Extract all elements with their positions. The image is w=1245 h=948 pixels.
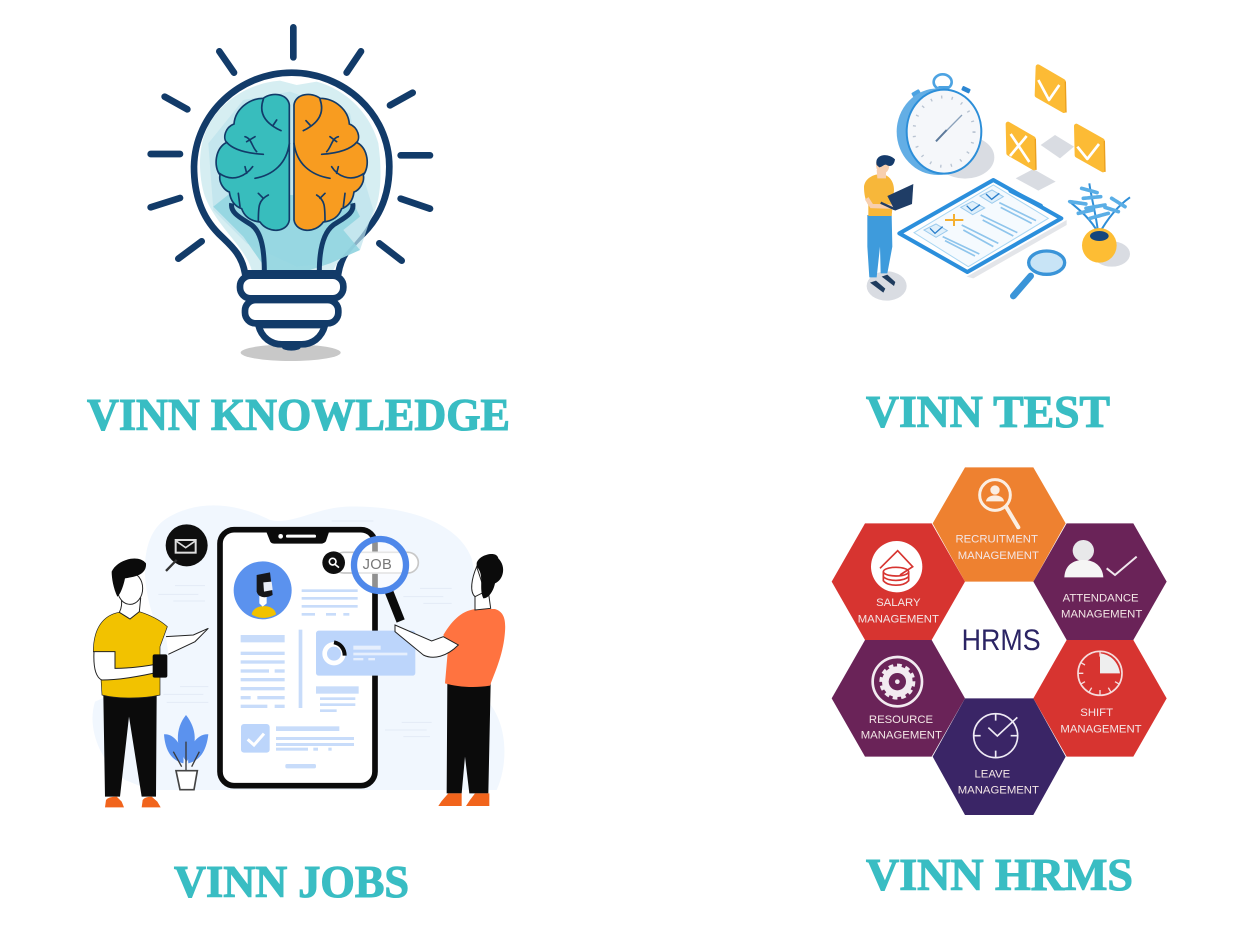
hexagon: salary management: SALARY [876,597,921,609]
hexagon: leave management [933,698,1066,815]
glass bulb [194,73,389,273]
profile avatar [234,561,292,619]
answer cards [1008,67,1105,171]
hexagon: resource management: RESOURCE [869,714,934,726]
magnifying glass [1013,251,1065,296]
person in orange [395,554,505,806]
panel: light bulb brain illustration [151,27,430,361]
chart card [316,631,415,676]
message bubble icon [166,524,208,571]
hexagon: leave management: MANAGEMENT [958,785,1039,797]
hexagon: shift management: SHIFT [1080,707,1113,719]
rays [151,27,430,261]
plant [164,715,208,790]
hexagon: shift management [1033,640,1167,757]
heading: VINN JOBS: VINN JOBS [174,857,409,907]
job search bar and magnifying glass: JOB [363,557,392,573]
bulb base [240,276,343,351]
heading: VINN HRMS: VINN HRMS [866,850,1133,900]
hexagon: recruitment management [933,467,1066,582]
center label: HRMS: HRMS [962,624,1041,657]
hexagon: recruitment management: RECRUITMENT [955,533,1038,545]
heading: VINN TEST: VINN TEST [866,387,1110,437]
panel: job search illustration [93,505,505,807]
person with laptop [864,155,913,293]
job search bar and magnifying glass [322,539,418,621]
panel: HRMS hexagon diagram [832,467,1167,815]
brain left hemisphere [216,94,289,230]
heading: VINN KNOWLEDGE: VINN KNOWLEDGE [87,390,510,440]
brain right hemisphere [294,94,367,230]
filament wires [232,203,353,272]
hexagon: leave management: LEAVE [974,768,1011,780]
checkbox [241,724,270,753]
hexagon: attendance management: MANAGEMENT [1061,608,1142,620]
hexagon: shift management: MANAGEMENT [1060,723,1142,735]
person in yellow [93,558,208,807]
hexagon: salary management: MANAGEMENT [858,613,939,625]
panel: online test illustration [864,67,1130,301]
background brick doodles [158,521,452,737]
floor shadows [867,135,1130,301]
stopwatch [897,74,981,175]
watercolor fill [200,81,381,270]
clipboard checklist [899,180,1061,272]
hexagon: resource management: MANAGEMENT [861,730,942,742]
bulb shadow [241,344,341,361]
brain folds [219,99,364,222]
plant [1068,183,1130,263]
hexagon: attendance management [1033,523,1167,640]
phone [220,530,375,786]
resume text lines [241,589,359,768]
hexagon: salary management [832,523,965,640]
hexagon: resource management [832,640,965,757]
background blob [93,505,504,790]
hexagon: recruitment management: MANAGEMENT [958,550,1039,562]
hexagon: attendance management: ATTENDANCE [1063,592,1139,604]
